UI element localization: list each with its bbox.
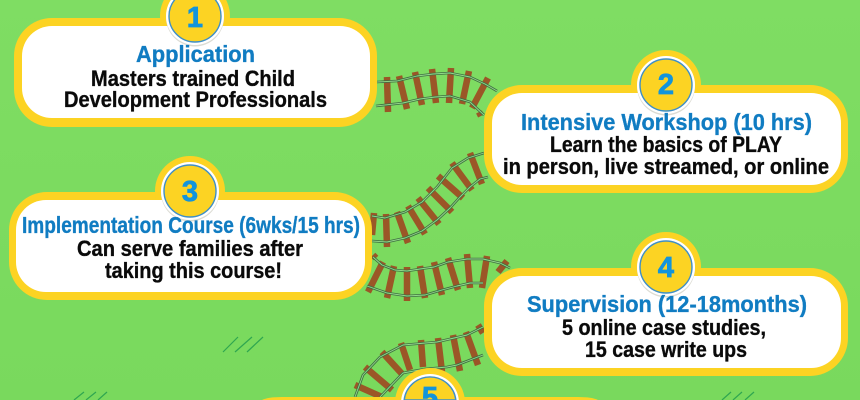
text: step 1 description: Masters trained Child xyxy=(91,66,295,91)
text: step 1 description: Development Professionals xyxy=(64,87,327,112)
panel: step 3 implementation course xyxy=(9,156,372,300)
railway track 2 to 3 xyxy=(372,153,488,247)
text: step 3 description: taking this course! xyxy=(105,258,282,283)
heading: supervision: Supervision (12-18months) xyxy=(527,291,807,317)
text: step 3 description xyxy=(77,236,303,283)
grass tufts xyxy=(74,337,754,400)
panel: step 1 application xyxy=(14,0,377,127)
text: step 2 description xyxy=(503,132,829,179)
heading: implementation course: Implementation Course (6wks/15 hrs) xyxy=(22,212,360,238)
text: step 2 description: Learn the basics of PLAY xyxy=(550,132,782,157)
step number 2: 2 xyxy=(658,69,674,101)
panel: step 4 supervision xyxy=(484,232,848,376)
step number 3: 3 xyxy=(182,176,198,208)
text: step 2 description: in person, live streamed, or online xyxy=(503,154,829,179)
railway track 4 to 5 xyxy=(355,325,483,397)
text: step 4 description: 15 case write ups xyxy=(585,337,747,362)
text: step 1 description xyxy=(64,66,327,112)
step number 1: 1 xyxy=(187,2,203,34)
text: step 3 description: Can serve families after xyxy=(77,236,303,261)
heading: intensive workshop: Intensive Workshop (10 hrs) xyxy=(521,109,812,135)
panel: step 5 partially visible xyxy=(262,368,598,400)
panel: step 2 intensive workshop xyxy=(484,50,848,193)
text: step 4 description xyxy=(562,315,766,362)
railway track 1 to 2 xyxy=(376,68,497,116)
heading: application: Application xyxy=(136,41,255,67)
railway track 3 to 4 xyxy=(367,254,510,301)
text: step 4 description: 5 online case studies, xyxy=(562,315,766,340)
step number 4: 4 xyxy=(658,252,674,284)
